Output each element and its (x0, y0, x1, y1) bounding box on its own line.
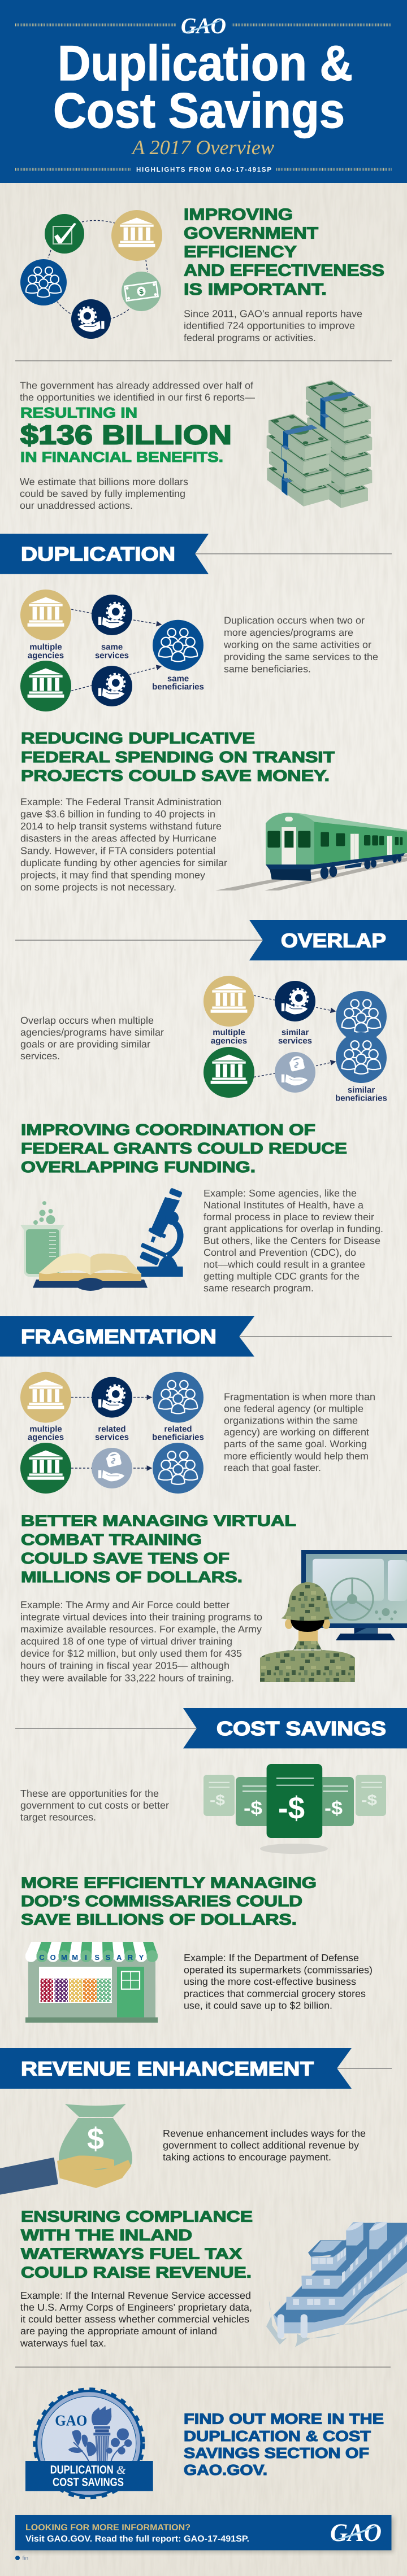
intro heading: AND EFFECTIVENESS (184, 262, 384, 280)
waterways example text: Example: If the Internal Revenue Service accessed (20, 2290, 251, 2301)
intro body text: Since 2011, GAO’s annual reports have (184, 308, 362, 320)
icon: beneficiaries A (153, 1372, 204, 1423)
icon: services A (275, 981, 315, 1021)
virtual training example text: integrate virtual devices into their training programs to (20, 1612, 262, 1623)
diagram labels: agencies (28, 1433, 64, 1442)
monitor (301, 1550, 407, 1640)
diagram labels: beneficiaries (152, 1433, 204, 1442)
icon: beneficiaries (153, 620, 204, 671)
awning with sign (25, 1942, 158, 1962)
badge banner (25, 2461, 153, 2491)
awning with sign: Y (139, 1953, 144, 1962)
awning with sign: R (128, 1953, 133, 1962)
awning with sign: M (72, 1953, 78, 1962)
icon: services A (92, 1377, 132, 1418)
virtual training example text: device for $12 million, but only used them for 435 (20, 1648, 242, 1659)
commissaries example text: operated its supermarkets (commissaries) (184, 1964, 373, 1975)
small bills: -$ (210, 1792, 226, 1809)
subtitle: A 2017 Overview (131, 136, 274, 159)
icon: services B (92, 666, 132, 706)
diagram labels: multiple (213, 1028, 245, 1037)
grants example text (204, 1187, 383, 1294)
diagram labels: agencies (211, 1036, 247, 1046)
title: Duplication & (58, 35, 353, 91)
icon: soldier at driving simulator (260, 1550, 407, 1682)
heading: virtual training (21, 1512, 296, 1586)
grants example text: grant applications for overlap in funding. (204, 1223, 383, 1234)
title (53, 35, 353, 138)
highlights label: HIGHLIGHTS FROM GAO-17-491SP (136, 167, 271, 173)
door (117, 1967, 144, 2018)
section banner: revenue enhancement (0, 2048, 392, 2089)
intro body text: identified 724 opportunities to improve (184, 320, 355, 331)
heading: virtual training: COMBAT TRAINING (21, 1531, 202, 1548)
awning with sign: M (61, 1953, 67, 1962)
heading: commissaries: DOD’S COMMISSARIES COULD (21, 1892, 302, 1910)
icon: bank gold (111, 210, 162, 261)
title: Cost Savings (53, 82, 345, 138)
fragmentation definition: reach that goal faster. (224, 1462, 321, 1473)
financial benefits text: could be saved by fully implementing (20, 488, 185, 499)
transit example text: Sandy. However, if FTA considers potential (20, 845, 215, 856)
heading: waterways: WITH THE INLAND (21, 2226, 192, 2244)
transit example text: duplicate funding by other agencies for similar (20, 857, 227, 868)
awning with sign: A (116, 1953, 122, 1962)
intro body text (184, 308, 362, 343)
credit mark (15, 2556, 28, 2561)
icon: cash: $ (138, 287, 144, 296)
heading: commissaries: SAVE BILLIONS OF DOLLARS. (21, 1911, 297, 1928)
diagram labels (28, 1424, 204, 1442)
awning with sign: I (85, 1953, 87, 1962)
waterways example text (20, 2290, 252, 2348)
icon: agency A (20, 590, 71, 640)
grants example text: same research program. (204, 1282, 314, 1294)
diagram labels: multiple (29, 643, 62, 652)
heading: grants: FEDERAL GRANTS COULD REDUCE (21, 1139, 347, 1157)
diagram labels: services (95, 650, 129, 661)
heading: virtual training: BETTER MANAGING VIRTUAL (21, 1512, 296, 1530)
heading: transit (21, 729, 335, 784)
revenue enhancement definition (163, 2128, 366, 2163)
beaker (20, 1201, 64, 1277)
credit mark: fin (23, 2556, 28, 2561)
diagram labels: same (101, 643, 123, 652)
virtual training example text (20, 1599, 262, 1684)
diagram labels: beneficiaries (152, 682, 204, 692)
heading: grants: OVERLAPPING FUNDING. (21, 1158, 256, 1176)
footer panel: Visit GAO.GOV. Read the full report: GAO-17-491SP. (25, 2534, 249, 2544)
commissaries example text: practices that commercial grocery stores (184, 1988, 366, 1999)
call to action: SAVINGS SECTION OF (184, 2444, 369, 2461)
commissaries example text: using the more cost-effective business (184, 1976, 356, 1987)
icon: money bag in hand: $ (87, 2122, 104, 2156)
badge banner: COST SAVINGS (53, 2475, 124, 2488)
diagram labels: beneficiaries (335, 1093, 387, 1103)
grants example text: Control and Prevention (CDC), do (204, 1247, 356, 1258)
section banner: duplication (0, 534, 392, 574)
fragmentation definition: one federal agency (or multiple (224, 1403, 363, 1414)
revenue enhancement definition: taking actions to encourage payment. (163, 2151, 331, 2163)
transit example text: 2014 to help transit systems withstand future (20, 820, 222, 832)
grants example text: Example: Some agencies, like the (204, 1187, 357, 1199)
grants example text: National Institutes of Health, have a (204, 1199, 363, 1211)
section banner: cost savings (15, 1708, 407, 1748)
heading: virtual training: MILLIONS OF DOLLARS. (21, 1568, 243, 1586)
intro heading: EFFICIENCY (184, 243, 297, 261)
callout: $136 billion: $136 BILLION (20, 421, 232, 451)
icon: beneficiaries B (336, 1032, 387, 1083)
duplication definition: Duplication occurs when two or (224, 615, 365, 626)
fragmentation definition: parts of the same goal. Working (224, 1438, 367, 1449)
microscope (137, 1187, 183, 1277)
virtual training example text: Example: The Army and Air Force could better (20, 1599, 230, 1610)
fragmentation definition: agency) are working on different (224, 1426, 369, 1438)
diagram labels: multiple (29, 1424, 62, 1434)
call to action: GAO.GOV. (184, 2461, 267, 2478)
intro heading: IS IMPORTANT. (184, 281, 327, 299)
diagram labels: similar (348, 1085, 375, 1095)
icon: beneficiaries A (336, 991, 387, 1042)
heading: waterways: ENSURING COMPLIANCE (21, 2208, 253, 2225)
fragmentation definition: more efficiently would help them (224, 1450, 369, 1461)
overlap definition: Overlap occurs when multiple (20, 1015, 154, 1026)
waterways example text: the U.S. Army Corps of Engineers’ proprietary data, (20, 2302, 252, 2313)
cost savings definition: These are opportunities for the (20, 1788, 159, 1799)
icon: agency A (204, 976, 254, 1027)
diagram labels: services (278, 1036, 312, 1046)
heading: grants: IMPROVING COORDINATION OF (21, 1121, 315, 1138)
transit example text: disasters in the areas affected by Hurricane (20, 833, 217, 844)
diagram labels: related (164, 1424, 192, 1434)
transit example text: gave $3.6 billion in funding to 40 projects in (20, 809, 215, 820)
duplication definition: working on the same activities or (223, 639, 371, 650)
commissaries example text: Example: If the Department of Defense (184, 1952, 359, 1963)
icon: agency B (204, 1047, 254, 1098)
badge banner: & (116, 2463, 126, 2477)
awning with sign: S (106, 1953, 111, 1962)
icon: people blue (20, 259, 67, 305)
duplication definition: providing the same services to the (224, 651, 378, 662)
section banner: revenue enhancement: REVENUE ENHANCEMENT (21, 2058, 314, 2080)
financial benefits text: We estimate that billions more dollars (20, 476, 188, 487)
soldier (260, 1582, 355, 1682)
transit example text: projects, it may find that spending money (20, 870, 205, 881)
header panel (0, 0, 407, 183)
diagram: overlap (204, 976, 387, 1103)
badge: duplication and cost savings: GAO (55, 2412, 87, 2429)
icon: lab beaker, microscope and book (20, 1187, 183, 1291)
store window with produce (39, 1967, 112, 2003)
GAO logo footer: GAO (330, 2518, 382, 2547)
call to action: FIND OUT MORE IN THE (184, 2411, 384, 2427)
financial benefits text: The government has already addressed over half of (20, 379, 253, 391)
grants example text: getting multiple CDC grants for the (204, 1270, 360, 1282)
revenue enhancement definition: Revenue enhancement includes ways for the (163, 2128, 366, 2139)
fragmentation definition: organizations within the same (224, 1414, 358, 1426)
transit example text (20, 796, 227, 893)
intro heading (184, 206, 384, 299)
overlap definition: agencies/programs have similar (20, 1027, 164, 1038)
duplication definition: same beneficiaries. (224, 663, 311, 675)
commissaries example text (184, 1952, 373, 2011)
call to action: DUPLICATION & COST (184, 2427, 371, 2444)
transit example text: Example: The Federal Transit Administration (20, 796, 222, 807)
intro body text: federal programs or activities. (184, 332, 316, 343)
grants example text: But others, like the Centers for Disease (204, 1235, 380, 1246)
heading: transit: FEDERAL SPENDING ON TRANSIT (21, 748, 335, 766)
torch and leaves (68, 2406, 132, 2461)
virtual training example text: maximize available resources. For example, the Army (20, 1623, 262, 1635)
duplication definition: more agencies/programs are (224, 627, 353, 638)
medium bills: -$ (244, 1798, 262, 1819)
diagram labels (211, 1028, 387, 1103)
icon: services A (92, 595, 132, 635)
financial benefits text: our unaddressed actions. (20, 500, 133, 511)
icon: agency B (20, 661, 71, 711)
medium bills (236, 1777, 354, 1826)
small bills (204, 1775, 386, 1816)
icon: cash (122, 272, 161, 311)
cost savings definition: government to cut costs or better (20, 1800, 169, 1811)
financial benefits text: the opportunities we identified in our first 6 reports— (20, 392, 256, 403)
section banner: duplication: DUPLICATION (21, 543, 175, 565)
dotted rule top (15, 24, 392, 26)
awning with sign: S (94, 1953, 99, 1962)
awning with sign: O (50, 1953, 56, 1962)
diagram labels: related (98, 1424, 126, 1434)
section banner: fragmentation: FRAGMENTATION (21, 1326, 217, 1348)
diagram: fragmentation (20, 1372, 204, 1494)
waterways example text: waterways fuel tax. (20, 2337, 106, 2348)
virtual training example text: hours of training in fiscal year 2015— although (20, 1660, 230, 1671)
cost savings definition (20, 1788, 169, 1823)
diagram labels: services (95, 1433, 129, 1442)
small bills: -$ (361, 1792, 378, 1809)
fragmentation definition (224, 1391, 375, 1473)
diagram labels: same (167, 674, 189, 683)
callout: $136 billion: RESULTING IN (20, 405, 137, 421)
section banner: fragmentation (0, 1316, 392, 1356)
diagram labels (28, 643, 204, 692)
duplication definition (223, 615, 378, 675)
cost savings definition: target resources. (20, 1811, 96, 1823)
waterways example text: are paying the appropriate amount of inland (20, 2325, 217, 2337)
heading: waterways: COULD RAISE REVENUE. (21, 2263, 252, 2281)
icon: stacks of money (267, 380, 372, 508)
overlap definition: services. (20, 1050, 60, 1062)
section banner: cost savings: COST SAVINGS (217, 1718, 386, 1740)
icon: commissary store (25, 1942, 158, 2023)
heading: transit: REDUCING DUPLICATIVE (21, 729, 255, 746)
awning with sign: C (39, 1953, 45, 1962)
badge: duplication and cost savings (25, 2389, 153, 2498)
call to action (184, 2411, 384, 2478)
large bill (267, 1764, 322, 1838)
badge banner: DUPLICATION (50, 2464, 114, 2477)
grants example text: not—which could result in a grantee (204, 1259, 365, 1270)
book (33, 1253, 148, 1291)
icon: barge ship (266, 2222, 407, 2347)
callout: $136 billion: IN FINANCIAL BENEFITS. (20, 449, 223, 465)
large bill: -$ (278, 1790, 305, 1826)
waterways example text: it could better assess whether commercial vehicles (20, 2313, 249, 2325)
icon: green checkbox (45, 214, 84, 254)
icon: gear in hand (71, 299, 111, 339)
intro heading: GOVERNMENT (184, 225, 318, 243)
icon: services B (275, 1052, 315, 1093)
fragmentation definition: Fragmentation is when more than (224, 1391, 375, 1403)
icon: minus-dollar bills (204, 1764, 386, 1854)
GAO logo: GAO (181, 13, 226, 38)
heading: waterways (21, 2208, 253, 2281)
section banner: overlap: OVERLAP (281, 929, 386, 952)
diagram labels: similar (282, 1028, 309, 1037)
grants example text: formal process in place to review their (204, 1211, 374, 1222)
commissaries example text: use, it could save up to $2 billion. (184, 1999, 332, 2011)
diagram: duplication (20, 590, 204, 711)
icon: agency B (20, 1443, 71, 1494)
callout: $136 billion (20, 405, 232, 465)
revenue enhancement definition: government to collect additional revenue by (163, 2140, 359, 2151)
icon: services B (92, 1448, 132, 1488)
icon: agency A (20, 1372, 71, 1423)
heading: grants (21, 1121, 347, 1176)
diagram labels: agencies (28, 650, 64, 661)
virtual training example text: they were available for 33,222 hours of training. (20, 1673, 234, 1684)
icon: beneficiaries B (153, 1443, 204, 1494)
intro heading: IMPROVING (184, 206, 293, 224)
heading: waterways: WATERWAYS FUEL TAX (21, 2245, 243, 2262)
overlap definition: goals or are providing similar (20, 1038, 150, 1050)
overlap definition (20, 1015, 164, 1062)
transit example text: on some projects is not necessary. (20, 881, 176, 893)
footer panel: LOOKING FOR MORE INFORMATION? (25, 2523, 190, 2533)
heading: transit: PROJECTS COULD SAVE MONEY. (21, 767, 330, 784)
footer panel (15, 2515, 393, 2552)
virtual training example text: acquired 18 of one type of virtual driver training (20, 1635, 232, 1647)
heading: commissaries (21, 1874, 317, 1928)
medium bills: -$ (324, 1798, 343, 1819)
financial benefits text (20, 379, 256, 511)
icon: money bag in hand (0, 2104, 132, 2195)
heading: virtual training: COULD SAVE TENS OF (21, 1549, 230, 1567)
icon: train (215, 813, 407, 890)
icon cluster: government efficiency cycle (20, 210, 162, 339)
heading: commissaries: MORE EFFICIENTLY MANAGING (21, 1874, 317, 1892)
section banner: overlap (15, 920, 407, 960)
